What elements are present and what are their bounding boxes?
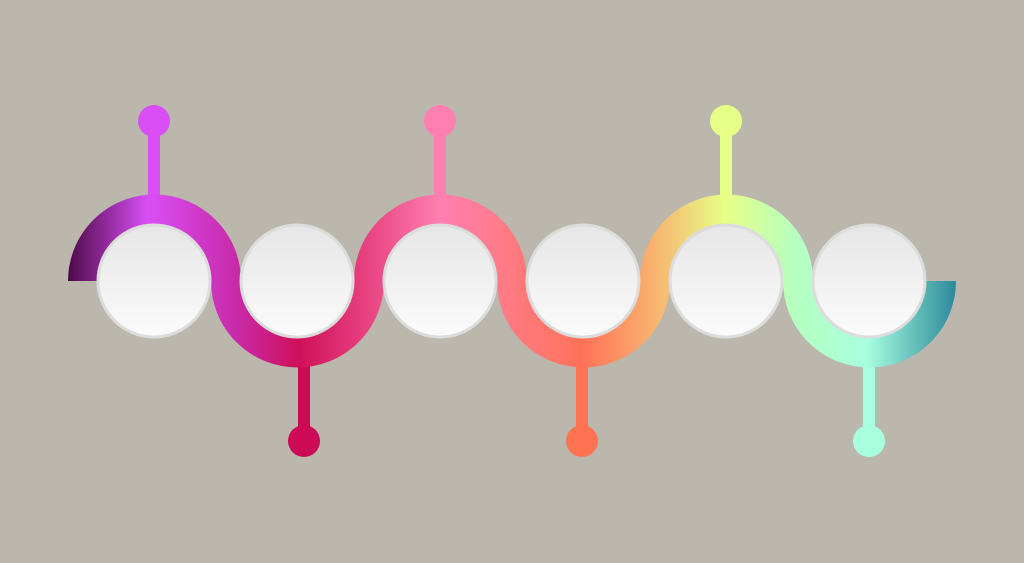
pin: top 1: [138, 105, 170, 200]
pin: bottom 3: [853, 362, 885, 457]
pin: bottom 2: [566, 362, 598, 457]
wave band: [83, 210, 941, 352]
pin: top 2: [424, 105, 456, 200]
circles: [98, 225, 925, 337]
pin: bottom 1: [288, 362, 320, 457]
pin: top 3: [710, 105, 742, 200]
